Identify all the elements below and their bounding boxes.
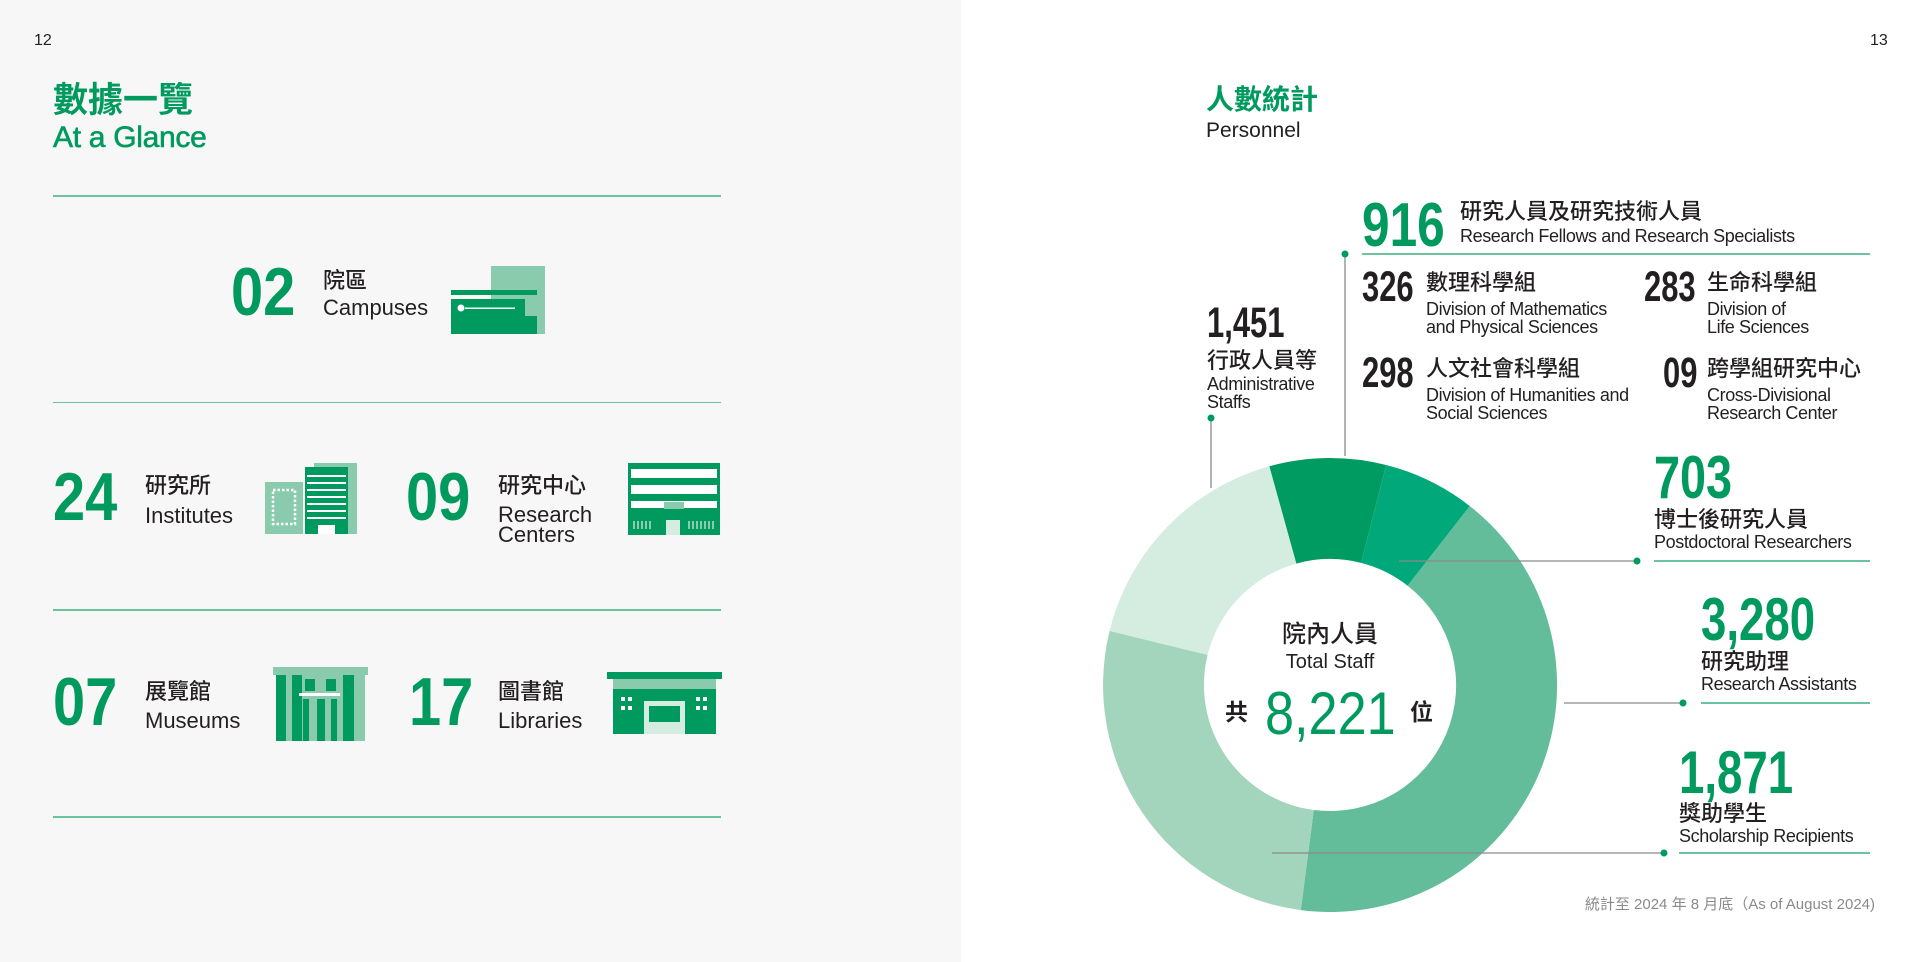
label: administrative staff 1,451: 1,451 — [1207, 299, 1284, 347]
label: administrative staff 1,451 — [1207, 299, 1317, 412]
title: Personnel — [1206, 78, 1318, 142]
stat: museums — [53, 664, 368, 741]
label: division life 283: 生命科學組 — [1707, 265, 1817, 297]
stat: institutes: Institutes — [145, 503, 233, 528]
label: division humanities 298: Social Sciences — [1426, 403, 1547, 423]
label: division humanities 298: Division of Humanities and — [1426, 385, 1629, 405]
stat: libraries: 17 — [409, 664, 473, 740]
label: division math 326: Division of Mathematics — [1426, 299, 1607, 319]
stat: museums: 展覽館 — [145, 674, 211, 706]
icon: library — [607, 672, 722, 734]
page number 12: 12 — [34, 32, 52, 49]
label: research fellows 916 — [1362, 191, 1795, 260]
label: administrative staff 1,451: Administrative — [1207, 374, 1314, 394]
text: Life Sciences — [1707, 317, 1809, 337]
label: research fellows 916: 研究人員及研究技術人員 — [1460, 194, 1702, 226]
label: cross-divisional 09 — [1663, 349, 1861, 423]
label: research assistants 3,280: 3,280 — [1701, 586, 1815, 653]
stat: libraries: 圖書館 — [498, 674, 564, 706]
icon: campus — [451, 266, 545, 334]
title: Personnel: 人數統計 — [1206, 78, 1318, 118]
label: cross-divisional 09: 09 — [1663, 349, 1697, 397]
stat: research centers: 09 — [406, 459, 470, 535]
stat: research centers: 研究中心 — [498, 468, 586, 500]
label: research fellows 916: Research Fellows and Research Specialists — [1460, 226, 1795, 246]
label: scholarship recipients 1,871 — [1679, 739, 1854, 846]
stat: museums: 07 — [53, 664, 117, 740]
label: division math 326: 326 — [1362, 263, 1414, 311]
stat: research centers: Research — [498, 502, 592, 527]
label: administrative staff 1,451: Staffs — [1207, 392, 1250, 412]
stat: campuses: Campuses — [323, 295, 428, 320]
label: postdoctoral 703: Postdoctoral Researchers — [1654, 532, 1852, 552]
stat: institutes: 研究所 — [145, 468, 211, 500]
label: division math 326 — [1362, 263, 1607, 337]
donut center label: 位 — [1410, 693, 1433, 727]
label: scholarship recipients 1,871: 1,871 — [1679, 739, 1793, 806]
page number 13: 13 — [1870, 32, 1888, 49]
icon: research center — [628, 463, 720, 535]
label: postdoctoral 703: 703 — [1654, 444, 1732, 511]
donut center label: 8,221 — [1265, 680, 1396, 747]
label: postdoctoral 703 — [1654, 444, 1852, 552]
label: cross-divisional 09: Cross-Divisional — [1707, 385, 1831, 405]
label: division life 283 — [1644, 263, 1817, 337]
label: division humanities 298: 298 — [1362, 349, 1414, 397]
label: research assistants 3,280 — [1701, 586, 1856, 694]
title: At a Glance: At a Glance — [53, 121, 206, 154]
label: scholarship recipients 1,871: 獎助學生 — [1679, 796, 1767, 828]
stat: libraries — [409, 664, 722, 740]
label: research assistants 3,280: 研究助理 — [1701, 644, 1789, 676]
label: division humanities 298 — [1362, 349, 1629, 423]
footnote: 統計至 2024 年 8 月底（As of August 2024) — [1585, 896, 1875, 913]
icon: institute building — [265, 463, 357, 534]
dividers — [53, 195, 721, 197]
label: scholarship recipients 1,871: Scholarship Recipients — [1679, 826, 1853, 846]
stat: museums: Museums — [145, 708, 240, 733]
title: Personnel: Personnel — [1206, 119, 1301, 142]
label: research assistants 3,280: Research Assistants — [1701, 674, 1856, 694]
label: postdoctoral 703: 博士後研究人員 — [1654, 502, 1808, 534]
label: cross-divisional 09: Research Center — [1707, 403, 1837, 423]
label: division math 326: 數理科學組 — [1426, 265, 1536, 297]
stat: campuses: 02 — [231, 254, 295, 330]
label: division life 283: Division of — [1707, 299, 1786, 319]
stat: campuses — [231, 254, 545, 334]
donut center label — [1225, 614, 1433, 747]
label: cross-divisional 09: 跨學組研究中心 — [1707, 351, 1861, 383]
stat: research centers — [406, 459, 720, 547]
title: At a Glance: 數據一覽 — [53, 72, 193, 123]
donut center label: 院內人員 — [1282, 614, 1378, 649]
label: research fellows 916: 916 — [1362, 191, 1445, 260]
donut center label: 共 — [1225, 693, 1248, 727]
title: At a Glance — [52, 72, 206, 154]
stat: campuses: 院區 — [323, 263, 367, 295]
donut center label: Total Staff — [1286, 651, 1374, 673]
label: administrative staff 1,451: 行政人員等 — [1207, 343, 1317, 375]
stat: institutes — [53, 459, 357, 535]
icon: museum — [273, 667, 368, 741]
label: division life 283: 283 — [1644, 263, 1696, 311]
text: and Physical Sciences — [1426, 317, 1598, 337]
label: division humanities 298: 人文社會科學組 — [1426, 351, 1580, 383]
stat: libraries: Libraries — [498, 708, 582, 733]
stat: research centers: Centers — [498, 522, 575, 547]
left page background — [0, 0, 961, 962]
stat: institutes: 24 — [53, 459, 117, 535]
